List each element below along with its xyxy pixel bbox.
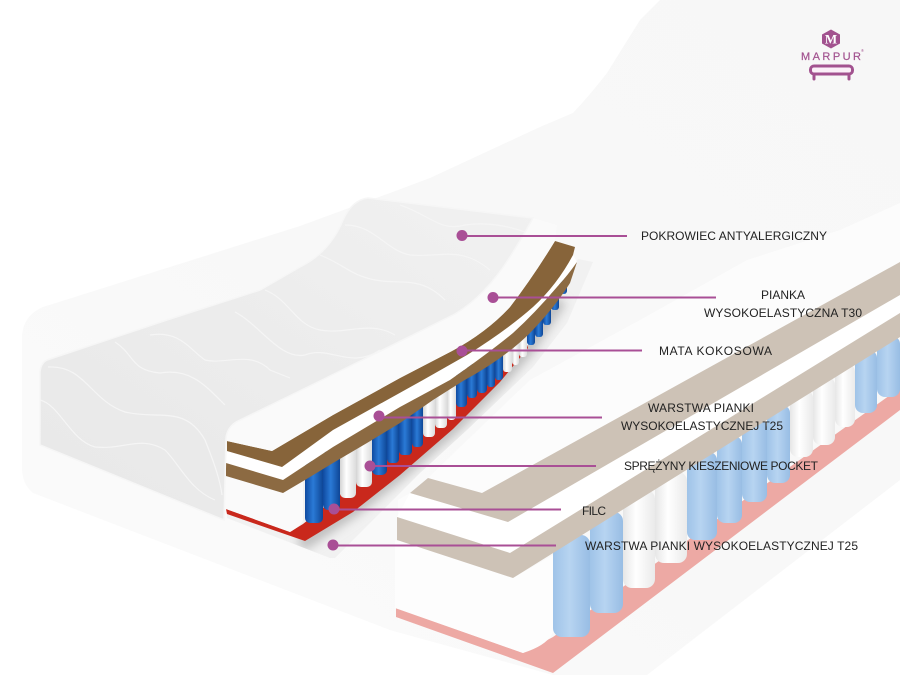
- front mattress: bottom foam plate: [227, 294, 572, 558]
- logo: Marpur: M: [825, 32, 837, 46]
- callout 4: foam layer T25: [374, 401, 783, 433]
- callout 3: coconut mat: MATA KOKOSOWA: [659, 344, 772, 358]
- callout 7: bottom foam T25: WARSTWA PIANKI WYSOKOELASTYCZNEJ T25: [585, 539, 858, 553]
- red felt layer: [226, 345, 528, 541]
- callout 1: cover: POKROWIEC ANTYALERGICZNY: [641, 229, 827, 243]
- callout 4: foam layer T25: WARSTWA PIANKI: [648, 401, 754, 415]
- callout 5: pocket springs: SPRĘŻYNY KIESZENIOWE POCKET: [624, 459, 819, 473]
- bottom foam block: [226, 476, 303, 532]
- logo: Marpur: ®: [861, 48, 864, 53]
- callout 5: pocket springs: [364, 459, 819, 473]
- callout 6: felt: FILC: [582, 504, 606, 518]
- callout 2: foam T30: PIANKA: [761, 288, 805, 302]
- cover quilting waves: [40, 205, 525, 500]
- allergy-proof quilted cover: [40, 198, 533, 520]
- top foam T30: [227, 218, 557, 451]
- upper coconut mat: [227, 241, 575, 467]
- ghost lower coconut band: [397, 313, 900, 578]
- white foam between coconut mats: [226, 255, 577, 480]
- callout 7: bottom foam T25: [328, 539, 858, 553]
- callout 3: coconut mat: [456, 344, 772, 358]
- front mattress: cut-away layers: [226, 218, 577, 541]
- ghost felt layer: [396, 388, 900, 673]
- ghost white foam between bands: [397, 295, 900, 553]
- logo: Marpur: [801, 30, 864, 79]
- ghost pocket springs: [553, 336, 900, 637]
- callout 6: felt: [328, 504, 606, 518]
- ghost foam block: [395, 540, 553, 653]
- ghost upper coconut band: [410, 262, 900, 522]
- pocket springs: [305, 280, 567, 523]
- callout 1: cover: [456, 229, 827, 243]
- ghost mattress: right section layers: [395, 262, 900, 673]
- lower coconut mat: [226, 262, 577, 493]
- callout 2: foam T30: [488, 288, 862, 320]
- logo: Marpur: MARPUR: [801, 51, 861, 63]
- callout 4: foam layer T25: WYSOKOELASTYCZNEJ T25: [621, 419, 783, 433]
- callout 2: foam T30: WYSOKOELASTYCZNA T30: [704, 306, 862, 320]
